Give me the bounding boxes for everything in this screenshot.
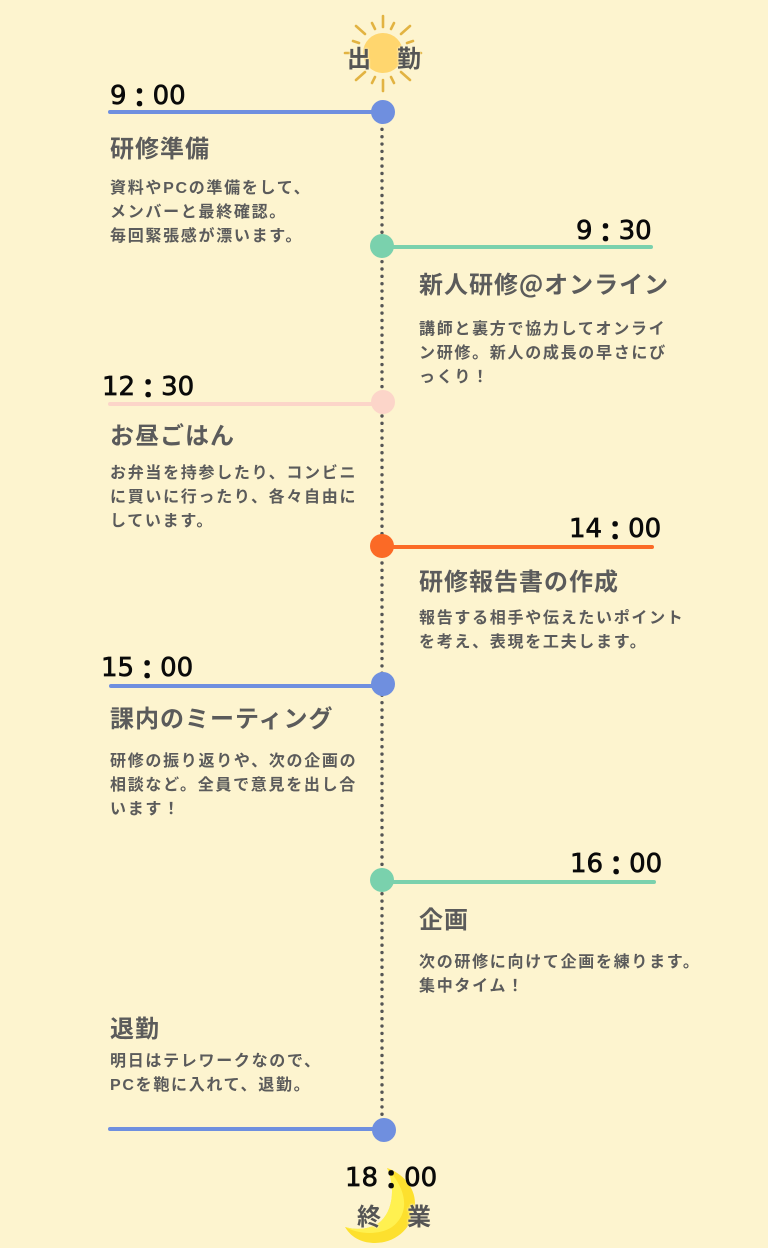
time: 14：00 [569, 514, 661, 547]
event: 15:00 [101, 653, 395, 818]
description: ン研修。新人の成長の早さにび [419, 345, 667, 362]
timeline dotted line [380, 128, 384, 1116]
description: います！ [110, 801, 181, 818]
description: 明日はテレワークなので、 [110, 1053, 322, 1070]
title: お昼ごはん [110, 416, 235, 451]
description: 資料やPCの準備をして、 [110, 180, 311, 197]
event: leaving work [108, 1009, 396, 1142]
marker [371, 100, 395, 124]
description: 集中タイム！ [419, 978, 525, 995]
icon: moon [345, 1168, 415, 1243]
title: 企画 [419, 900, 469, 935]
connector [109, 684, 379, 688]
description: に買いに行ったり、各々自由に [110, 489, 357, 506]
time: 9：00 [110, 81, 186, 114]
marker [370, 234, 394, 258]
title: 研修報告書の作成 [419, 562, 619, 597]
description: っくり！ [419, 369, 490, 386]
connector [108, 1127, 378, 1131]
description: 次の研修に向けて企画を練ります。 [419, 954, 701, 971]
heading: start of work: 出 [347, 39, 371, 74]
connector [108, 110, 378, 114]
event: 9:00 [108, 81, 395, 245]
description: しています。 [110, 513, 214, 530]
title: 研修準備 [110, 129, 210, 164]
time: 18:00: 18：00 [345, 1163, 437, 1196]
description [419, 320, 667, 386]
marker [371, 390, 395, 414]
description: PCを鞄に入れて、退勤。 [110, 1077, 311, 1094]
title: 課内のミーティング [110, 699, 334, 734]
description: 研修の振り返りや、次の企画の [110, 753, 357, 770]
time: 16：00 [570, 849, 662, 882]
description [110, 752, 357, 818]
event: 9:30 [370, 216, 669, 386]
description [419, 609, 685, 651]
title: 新人研修@オンライン [419, 265, 669, 300]
heading: end of work: 業 [407, 1197, 431, 1232]
connector [382, 545, 654, 549]
marker [371, 672, 395, 696]
description [110, 179, 311, 245]
marker [372, 1118, 396, 1142]
description: を考え、表現を工夫します。 [419, 634, 648, 651]
icon: sun [344, 14, 422, 92]
connector [382, 245, 653, 249]
event: 12:30 [102, 372, 395, 530]
description: 報告する相手や伝えたいポイント [419, 610, 685, 627]
connector [108, 402, 378, 406]
marker [370, 868, 394, 892]
description: メンバーと最終確認。 [110, 204, 287, 221]
heading: start of work [347, 39, 422, 74]
time: 12：30 [102, 372, 194, 405]
description: 相談など。全員で意見を出し合 [110, 777, 357, 794]
title: 退勤 [110, 1009, 160, 1044]
description [419, 953, 701, 995]
event: 14:00 [370, 514, 685, 651]
description: 毎回緊張感が漂います。 [110, 228, 303, 245]
heading: start of work: 勤 [397, 39, 421, 74]
description: お弁当を持参したり、コンビニ [110, 465, 357, 482]
heading: end of work: 終 [357, 1197, 381, 1232]
description [110, 1052, 322, 1094]
time: 9：30 [576, 216, 652, 249]
heading: end of work [357, 1197, 431, 1232]
time: 15：00 [101, 653, 193, 686]
description [110, 464, 357, 530]
marker [370, 534, 394, 558]
connector [382, 880, 656, 884]
description: 講師と裏方で協力してオンライ [419, 321, 666, 338]
event: 16:00 [370, 849, 701, 995]
